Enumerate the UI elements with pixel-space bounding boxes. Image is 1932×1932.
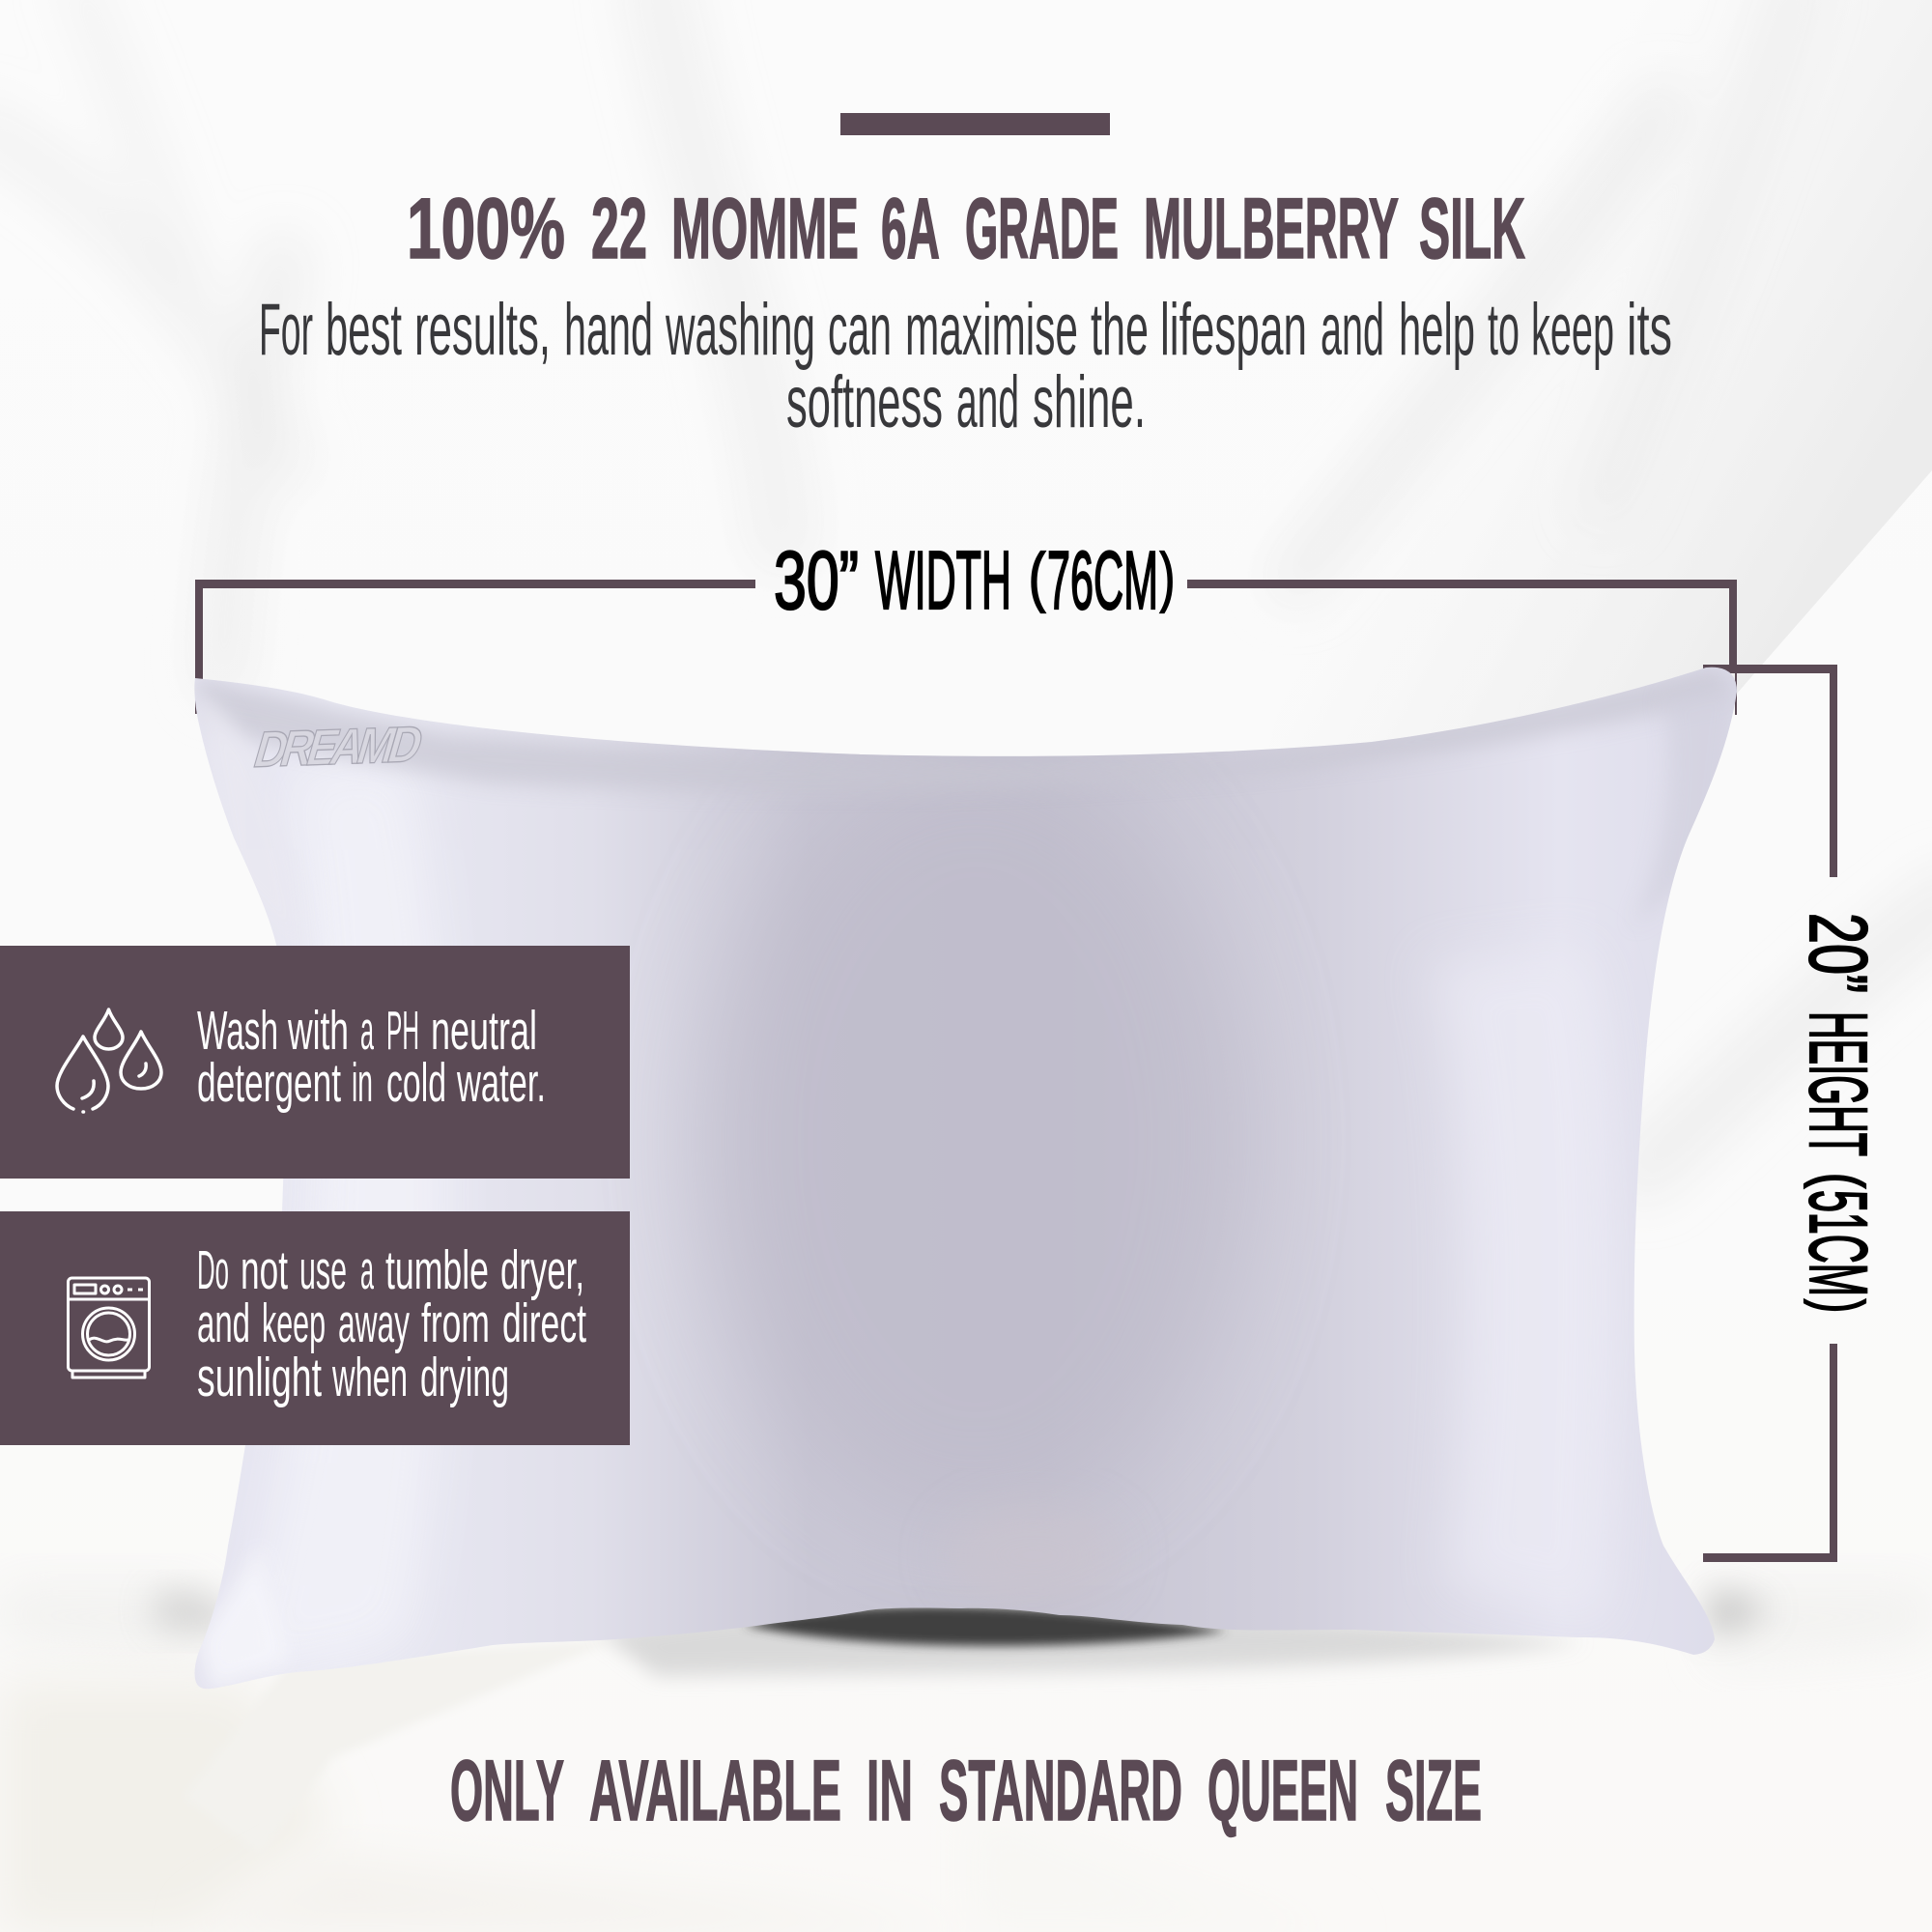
height label: 20” (1793, 913, 1884, 993)
top accent bar (840, 113, 1110, 135)
pillow shading (193, 667, 1739, 1690)
intro text: shine. (1033, 361, 1146, 443)
embroidered logo: DREAMD (248, 715, 430, 778)
footer heading (450, 1742, 1482, 1838)
panel text (197, 1239, 586, 1408)
panel text: drying (420, 1347, 509, 1408)
height label: ) (1804, 1299, 1877, 1313)
title (407, 180, 1525, 276)
pillow (184, 657, 1748, 1700)
width label: ( (1029, 540, 1045, 613)
panel text: with (287, 1000, 349, 1062)
title: MOMME (671, 180, 859, 276)
intro text: results, (414, 289, 551, 371)
dimension bracket: width (195, 580, 1737, 715)
title: 100% (407, 180, 565, 276)
intro text: keep (1531, 289, 1614, 371)
footer heading: ONLY (450, 1742, 564, 1838)
intro text: the (1091, 289, 1149, 371)
intro text: and (956, 361, 1019, 443)
panel text: not (241, 1239, 288, 1301)
panel: drying instructions (0, 1211, 630, 1445)
footer heading: STANDARD (939, 1742, 1182, 1838)
panel text: in (352, 1052, 373, 1114)
panel text: keep (262, 1293, 326, 1354)
title: GRADE (965, 180, 1119, 276)
intro text: its (1627, 289, 1672, 371)
intro text: to (1488, 289, 1520, 371)
intro text: lifespan (1160, 289, 1307, 371)
title: MULBERRY (1144, 180, 1399, 276)
height label: ( (1804, 1173, 1877, 1188)
panel text: neutral (431, 1000, 537, 1062)
panel text (197, 1000, 546, 1114)
panel text: tumble (385, 1239, 489, 1301)
height label: 51CM (1793, 1190, 1884, 1296)
footer heading: IN (867, 1742, 913, 1838)
intro text: softness (786, 361, 943, 443)
panel text: direct (502, 1293, 586, 1354)
width label (774, 535, 1175, 627)
intro text: help (1399, 289, 1475, 371)
panel text: from (421, 1293, 490, 1354)
panel text: a (360, 1239, 374, 1301)
title: 22 (591, 180, 647, 276)
intro text (259, 289, 1672, 443)
panel text: dryer, (500, 1239, 584, 1301)
panel text: and (197, 1293, 250, 1354)
panel text: away (338, 1293, 410, 1354)
intro text: maximise (905, 289, 1078, 371)
width label: WIDTH (875, 535, 1011, 627)
icon: washing machine (68, 1278, 149, 1378)
panel text: Wash (197, 1000, 278, 1062)
panel text: cold (386, 1052, 446, 1114)
width label: ) (1160, 540, 1175, 613)
title: 6A (881, 180, 940, 276)
panel text: when (331, 1347, 408, 1408)
width label: 76CM (1047, 535, 1158, 627)
panel text: sunlight (197, 1347, 322, 1408)
panel text: detergent (197, 1052, 341, 1114)
width label: 30” (774, 535, 859, 627)
panel text: a (360, 1000, 374, 1062)
title: SILK (1419, 180, 1525, 276)
dimension bracket: height (1703, 665, 1837, 1562)
intro text: and (1321, 289, 1384, 371)
footer heading: QUEEN (1208, 1742, 1358, 1838)
icon: water drops (57, 1009, 161, 1112)
intro text: For (259, 289, 313, 371)
intro text: can (828, 289, 892, 371)
intro text: washing (665, 289, 815, 371)
panel text: water. (456, 1052, 546, 1114)
panel text: PH (386, 1000, 419, 1062)
intro text: hand (564, 289, 653, 371)
footer heading: SIZE (1385, 1742, 1482, 1838)
intro text: best (326, 289, 402, 371)
pillow floor shadow (155, 1589, 1773, 1676)
footer heading: AVAILABLE (589, 1742, 841, 1838)
panel text: use (299, 1239, 347, 1301)
height label: HEIGHT (1793, 1011, 1884, 1156)
panel text: Do (197, 1239, 229, 1301)
panel: wash instructions (0, 946, 630, 1179)
